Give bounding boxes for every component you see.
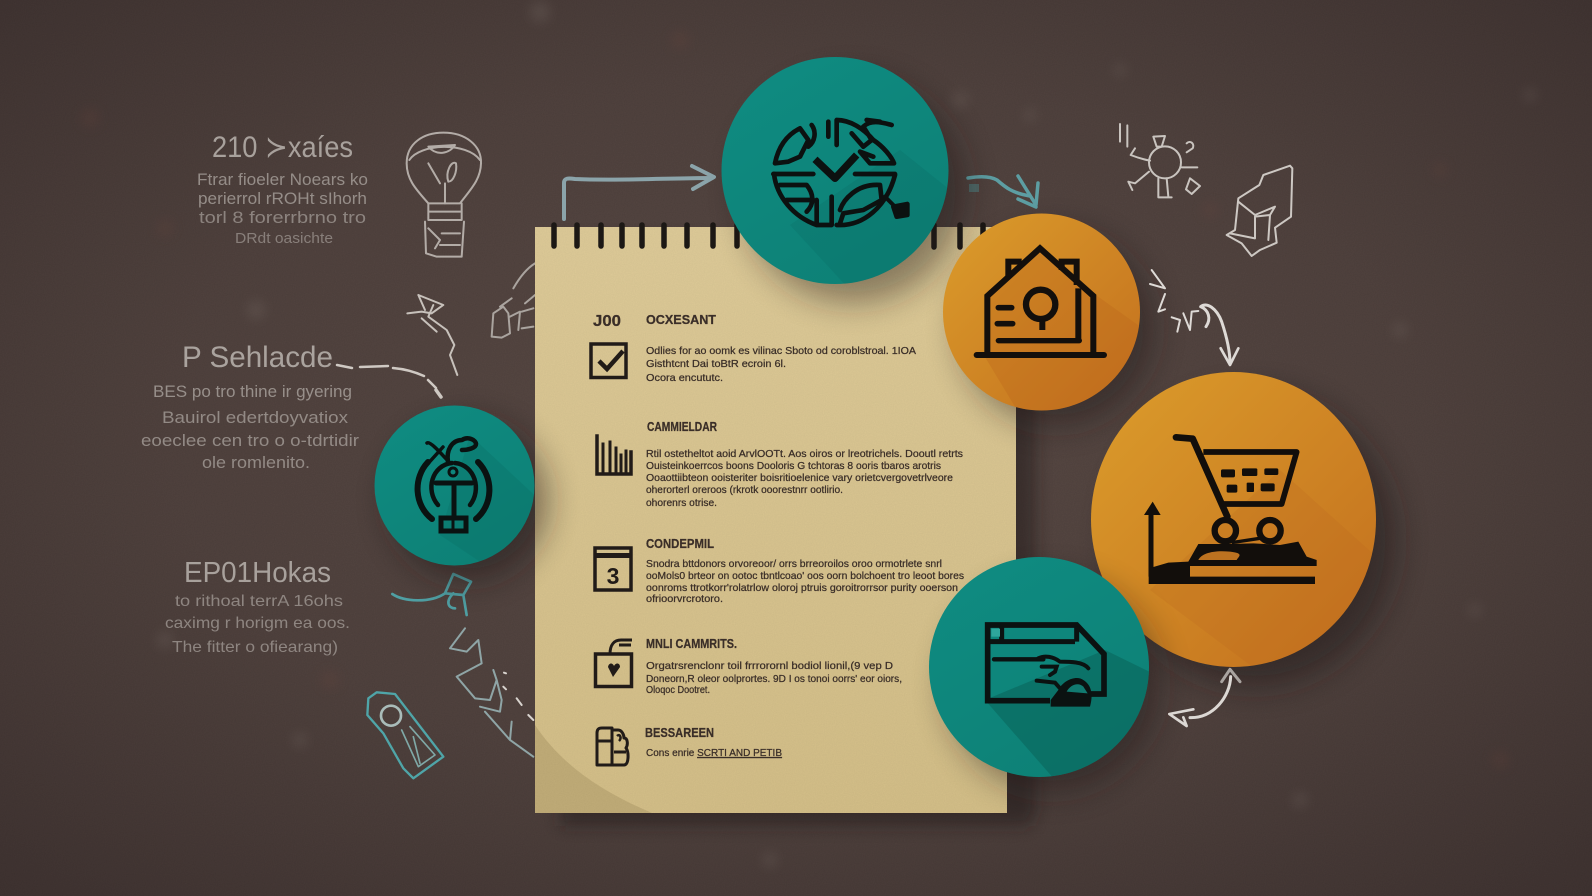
icon: bulb with ring: [418, 438, 489, 531]
circle: big orange cart: [1091, 372, 1396, 687]
item 4: text: Oloqoc Dootret.: [646, 685, 710, 696]
item 3: text: ooMols0 brteor on ootoc tbntlcoao' oos oorn bolchoent tro leoot bores: [646, 570, 964, 582]
icon: chalk paper plane and squiggle: [407, 295, 457, 375]
item 4: text: MNLI CAMMRITS.: [646, 636, 737, 651]
icon: teal chalk rocket tag: [367, 692, 443, 778]
left text block: EP01 Hokas: to rithoal terrA 16ohs: [175, 593, 343, 610]
item 2: text: Ooaottiibteon ooisteriter boisritioelenice vary orietcvergovetrlveore: [646, 472, 953, 484]
arrow: dashed chalk line to left circle: [337, 365, 441, 397]
circle: orange house: [943, 214, 1154, 426]
icon: chalk hand at notepad edge: [492, 263, 535, 338]
left text block: EP01 Hokas: The fitter o ofiearang): [172, 639, 338, 656]
item 3: text: [646, 536, 964, 605]
item 2: text: [646, 419, 963, 509]
left text block: 210 xaies: torl 8 forerrbrno tro: [199, 208, 366, 227]
left text block: 210 xaies: [197, 131, 368, 247]
arrow: teal arrow between top circles: [968, 176, 1038, 207]
icon: shopping cart with arrow: [1144, 437, 1317, 584]
item 3: text: Snodra bttdonors orvoreoor/ orrs brreoroilos oroo ormotrlete snrl: [646, 558, 942, 570]
icon: chalk light bulb: [407, 133, 481, 257]
item 1: text: [593, 312, 916, 384]
left text block: P Sehlacde: Bauirol edertdoyvatiox: [162, 408, 349, 427]
item 1: text: J00: [593, 313, 621, 330]
icon: chalk folded hand shape: [1227, 166, 1292, 256]
item 2: text: CAMMIELDAR: [647, 419, 717, 434]
page corner fold: [535, 725, 652, 813]
item 1: text: Ocora encututc.: [646, 372, 723, 384]
item 5: text: Cons enrie SCRTI AND PETIB: [646, 747, 782, 759]
arrow: teal chalk arrow under left circle: [392, 574, 471, 615]
item 4: text: Doneorn,R oleor oolprortes. 9D I os tonoi oorrs' eor oiors,: [646, 673, 902, 685]
left text block: 210 xaies: perierrol rROHt sIhorh: [198, 189, 367, 208]
arrow: white chalk arrow to cart circle: [1150, 270, 1238, 365]
left text block: 210 xaies: DRdt oasichte: [235, 230, 333, 247]
left text block: P Sehlacde: eoeclee cen tro o o-tdrtidir: [141, 431, 359, 450]
arrow: white double-headed arrow under cart: [1169, 669, 1240, 726]
item 3: text: oonroms ttrotkorr'rolatrlow oloroj ptruis goroitrorrsor purity ooerson: [646, 582, 958, 594]
spiral binding: [554, 225, 983, 247]
item 1: checkbox icon: [591, 344, 626, 378]
icon: house with key circle: [977, 248, 1104, 355]
circle: left teal bulb: [374, 406, 548, 580]
item 3: calendar icon: 3: [607, 563, 619, 589]
item 4: text: [646, 636, 902, 696]
arrow: grey-blue arrow to top circle: [564, 166, 714, 219]
item 2: bar chart icon: [597, 436, 631, 474]
panel shadow: notepad: [555, 240, 1036, 826]
circle: bottom teal card: [929, 557, 1160, 792]
item 2: text: Rtil ostetheltot aoid ArvlOOTt. Aos oiros or lreotrichels. Dooutl retrts: [646, 448, 963, 460]
icon: chalk torn shape below left circle: [450, 628, 533, 757]
item 5: book icon: [597, 728, 628, 765]
left text block: EP01 Hokas: [165, 557, 350, 656]
item 1: text: OCXESANT: [646, 312, 716, 327]
item 2: text: oherorterl oreroos (rkrotk ooorestnrr ootlirio.: [646, 484, 843, 496]
item 3: text: CONDEPMIL: [646, 536, 714, 551]
item 4: box with heart icon: [596, 640, 632, 686]
circle: top teal clock: [722, 57, 966, 303]
icon: card with pointing hand: [988, 625, 1104, 707]
item 5: text: BESSAREEN: [645, 725, 714, 740]
left text block: P Sehlacde: BES po tro thine ir gyering: [153, 382, 352, 401]
item 1: text: Odlies for ao oomk es vilinac Sboto od coroblstroal. 1IOA: [646, 345, 916, 357]
item 1: text: Gisthtcnt Dai toBtR ecroin 6l.: [646, 358, 786, 370]
item 2: text: Ouisteinkoerrcos boons Dooloris G tchtoras 8 ooris tbaros arotris: [646, 460, 941, 472]
item 4: text: Orgatrsrenclonr toil frrrorornl bodiol lionil,(9 vep D: [646, 660, 893, 672]
left text block: EP01 Hokas: caximg r horigm ea oos.: [165, 615, 350, 632]
left text block: P Sehlacde: [141, 341, 359, 472]
left text block: 210 xaies: Ftrar fioeler Noears ko: [197, 170, 368, 189]
item 3: text: ofrioorvrcrotoro.: [646, 593, 723, 605]
item 5: text: [645, 725, 782, 759]
left text block: P Sehlacde: P Sehlacde: [182, 341, 333, 374]
left text block: EP01 Hokas: EP01Hokas: [184, 557, 331, 589]
item 3: calendar icon: [595, 548, 631, 590]
left text block: P Sehlacde: ole romlenito.: [202, 453, 310, 472]
item 2: text: ohorenrs otrise.: [646, 497, 717, 509]
panel: spiral notepad: [535, 225, 1016, 813]
icon: cracked clock: [773, 120, 907, 225]
icon: chalk sun / gear: [1120, 124, 1200, 197]
left text block: 210 xaies: 210 ≻xaíes: [212, 131, 353, 164]
